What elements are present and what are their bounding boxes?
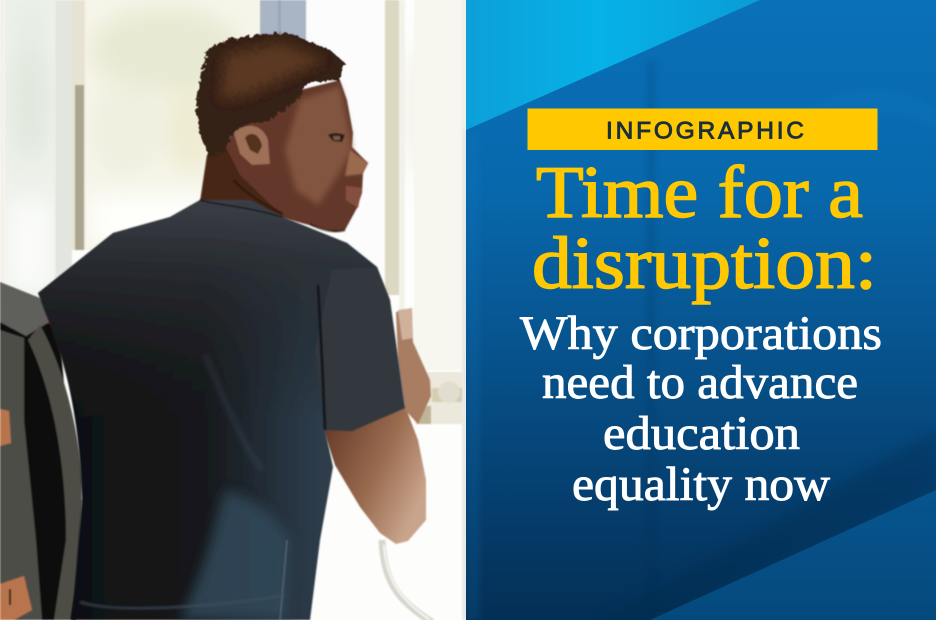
- ear: [234, 126, 270, 165]
- arm and hand: [322, 308, 431, 544]
- eye: [328, 133, 345, 142]
- faint window silhouette: [466, 60, 936, 620]
- label: INFOGRAPHIC: INFOGRAPHIC: [606, 118, 804, 144]
- yellow label bar: [528, 108, 878, 150]
- title: Time for a disruption: Time for a: [536, 152, 863, 234]
- neck crease: [233, 180, 283, 214]
- subtitle: Why corporations need to advance education equality now: education: [603, 407, 800, 460]
- window frames: [0, 0, 466, 620]
- face highlights: [285, 86, 352, 205]
- title: Time for a disruption: disruption:: [532, 223, 877, 305]
- red strap loop: [47, 292, 94, 327]
- dark band: [600, 430, 936, 620]
- t-shirt: [38, 200, 405, 620]
- door handle rail: [382, 540, 432, 620]
- lower right triangle: [650, 490, 936, 620]
- head and neck: [200, 80, 368, 232]
- hair: [196, 33, 345, 158]
- photo: student at window: [0, 0, 466, 620]
- backpack leather tabs: [0, 409, 11, 446]
- subtitle: Why corporations need to advance education equality now: Why corporations: [520, 307, 882, 360]
- title: Time for a disruption: [532, 152, 877, 305]
- backpack: [0, 282, 94, 620]
- subtitle: Why corporations need to advance education equality now: [520, 307, 882, 511]
- beard line: [310, 224, 345, 231]
- subtitle: Why corporations need to advance education equality now: need to advance: [542, 356, 858, 409]
- subtitle: Why corporations need to advance education equality now: equality now: [572, 458, 830, 511]
- panel: blue title background: [466, 0, 936, 620]
- lips: [346, 186, 362, 208]
- light blue corner triangle: [466, 0, 760, 130]
- window background: [0, 0, 466, 620]
- backpack shoulder strap: [28, 325, 82, 620]
